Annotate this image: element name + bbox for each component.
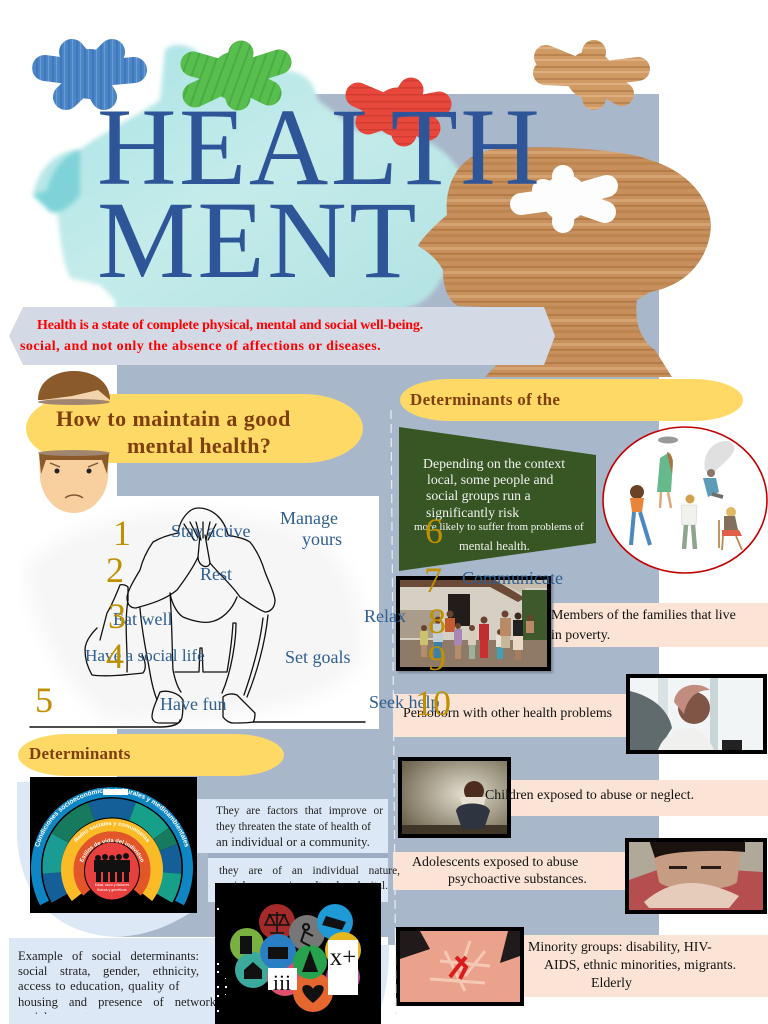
green panel text	[414, 456, 584, 553]
figure: woman on chair	[726, 507, 736, 517]
puzzle piece: red	[358, 90, 439, 134]
tip: stay active: Stay active	[171, 521, 250, 541]
list text: vulnerable groups: Minority groups: disability, HIV-	[528, 940, 712, 955]
list text: vulnerable groups	[403, 608, 736, 991]
list text: vulnerable groups: Members of the families that live	[551, 608, 736, 623]
illustration: people in red circle	[602, 426, 768, 574]
peach band: minority groups	[523, 935, 768, 997]
example text	[18, 949, 216, 1014]
example text: access to education, quality of	[18, 979, 180, 993]
green panel text: social groups run a	[426, 488, 531, 503]
overflow tips list: numbers six to ten: Communicate	[462, 568, 563, 588]
banner shape	[9, 307, 555, 365]
list text: vulnerable groups: in poverty.	[551, 628, 610, 643]
overflow tips list: numbers six to ten: 8	[428, 601, 446, 641]
decorative faint wash	[39, 523, 352, 710]
illustration: puzzle pieces and wooden head	[32, 39, 711, 377]
peach band: poverty	[550, 603, 768, 647]
small cloud	[658, 436, 678, 444]
figure: seated man	[707, 469, 715, 477]
chart: rainbow determinants model	[30, 777, 197, 913]
text box: example of social determinants	[9, 938, 219, 1024]
decorative band	[208, 853, 388, 858]
icon: sad face	[38, 450, 110, 513]
tips list: 4	[106, 636, 124, 676]
decorative dashed line	[390, 410, 397, 1015]
factors text: They are factors that improve or	[216, 805, 383, 817]
heading text: determinants of the: Determinants of the	[410, 390, 560, 409]
tips list: 1	[113, 513, 131, 553]
banner text: Health is a state of complete physical, mental and social well-being.	[37, 318, 423, 333]
small white label	[103, 789, 128, 795]
core circle	[84, 842, 140, 900]
green panel text: significantly risk	[426, 505, 519, 520]
puzzle piece: blue	[45, 52, 134, 97]
factors text	[216, 805, 383, 849]
heading pill: determinants of the	[400, 379, 743, 421]
icon panel: determinants icons	[215, 883, 381, 1024]
green panel text: more likely to suffer from problems of	[414, 521, 584, 533]
community networks ring	[67, 825, 156, 897]
photo: boy with cigarette	[625, 838, 767, 914]
peach band: health problems	[393, 694, 627, 737]
heading text: how to maintain: mental health?	[127, 433, 271, 458]
photo: older woman	[626, 674, 767, 754]
illustration: watercolor splash	[30, 42, 460, 307]
tips list: 5	[35, 680, 53, 720]
green panel text: mental health.	[459, 539, 530, 553]
chart: rainbow determinants model: Estilos de vida del individuo	[80, 838, 144, 862]
example text: housing and presence of network	[18, 995, 216, 1009]
silhouettes of people	[94, 853, 130, 882]
photo: family in front of house	[396, 576, 551, 671]
factors text: they threaten the state of health of	[216, 820, 371, 832]
banner text: social, and not only the absence of affections or diseases.	[20, 339, 381, 354]
list text: vulnerable groups: Children exposed to abuse or neglect.	[485, 788, 694, 803]
title: MENT	[97, 179, 419, 301]
social and living conditions ring	[52, 873, 60, 898]
illustration: seated person holding head	[29, 507, 366, 728]
tips list	[35, 508, 350, 720]
green shape	[399, 427, 596, 571]
panel: mental health tips sketch	[20, 496, 379, 729]
tips list: 2	[106, 550, 124, 590]
tip: manage yours: Manage	[280, 508, 338, 528]
banner text	[20, 318, 423, 354]
peach band: adolescents	[393, 852, 626, 890]
icon panel: determinants icons: x+	[330, 944, 356, 971]
tips list: Set goals	[285, 647, 350, 667]
panel: context text on green	[399, 427, 596, 571]
individual nature text	[219, 865, 400, 892]
tips list: yours	[302, 529, 342, 549]
list text: vulnerable groups: psychoactive substances.	[448, 872, 587, 887]
heading pill: determinants	[18, 734, 284, 776]
chart: rainbow determinants model: físicos y genéticos	[97, 888, 127, 892]
overflow tips list: numbers six to ten	[364, 511, 563, 723]
text box: individual nature	[208, 858, 388, 902]
overflow tips list: numbers six to ten: 6	[425, 511, 443, 551]
tips list: Rest	[200, 564, 232, 584]
title: HEALTH	[97, 86, 542, 208]
figure: woman in green	[657, 453, 673, 492]
heading text: how to maintain	[56, 406, 291, 458]
tips list: Have fun	[160, 694, 226, 714]
heading pill: how to maintain	[26, 394, 363, 463]
list text: vulnerable groups: Adolescents exposed to abuse	[412, 855, 578, 870]
overflow tips list: numbers six to ten: Relax	[364, 606, 406, 626]
overflow tips list: numbers six to ten: 10	[415, 683, 451, 723]
ring captions: Condiciones socioeconómicas, culturales y medioambientales	[35, 788, 188, 847]
example text: social strata, gender, ethnicity,	[18, 964, 199, 978]
icon: open head top	[38, 371, 110, 405]
list text: vulnerable groups: Persoborn with other health problems	[403, 706, 612, 721]
figure: man in white	[686, 494, 694, 504]
list text: vulnerable groups: AIDS, ethnic minorities, migrants.	[544, 958, 736, 973]
factors text: an individual or a community.	[216, 835, 370, 849]
wooden head silhouette	[418, 147, 711, 377]
list text: vulnerable groups: Elderly	[591, 976, 632, 991]
overflow tips list: numbers six to ten: Seek help	[369, 692, 439, 712]
overflow tips list: numbers six to ten: 7	[424, 560, 442, 600]
lifestyle ring	[79, 837, 145, 892]
chart: rainbow determinants model: Edad, sexo y factores	[95, 883, 129, 887]
icon panel: determinants icons: iii	[273, 970, 291, 995]
title	[97, 86, 542, 301]
definition banner	[9, 307, 555, 365]
text box: factors	[197, 799, 388, 853]
green panel text: Depending on the context	[423, 456, 565, 471]
individual nature text: they are of an individual nature,	[219, 865, 400, 877]
tips list: Have a social life	[85, 646, 205, 665]
peach band: abuse or neglect	[510, 780, 768, 816]
heading text: how to maintain: How to maintain a good	[56, 406, 291, 431]
puzzle piece: green	[193, 53, 279, 98]
outer ring	[36, 792, 188, 903]
photo: hands with red ribbon	[396, 927, 524, 1006]
overflow tips list: numbers six to ten: 9	[428, 638, 446, 678]
glyph icons	[265, 912, 289, 933]
tips list: 3	[108, 596, 126, 636]
heading text: determinants: Determinants	[29, 744, 131, 763]
individual nature text: social, economic, cultural and vital.	[219, 880, 388, 892]
photo: crouching child	[398, 757, 511, 838]
puzzle piece: tan	[545, 52, 638, 98]
chart: rainbow determinants model: Redes sociales y comunitarias	[74, 822, 150, 842]
example text: Example of social determinants:	[18, 949, 199, 963]
green panel text: local, some people and	[427, 472, 553, 487]
tips list: Eat well	[113, 609, 172, 629]
figure: woman in orange	[630, 485, 644, 499]
puzzle-shaped hole in head	[521, 176, 607, 222]
